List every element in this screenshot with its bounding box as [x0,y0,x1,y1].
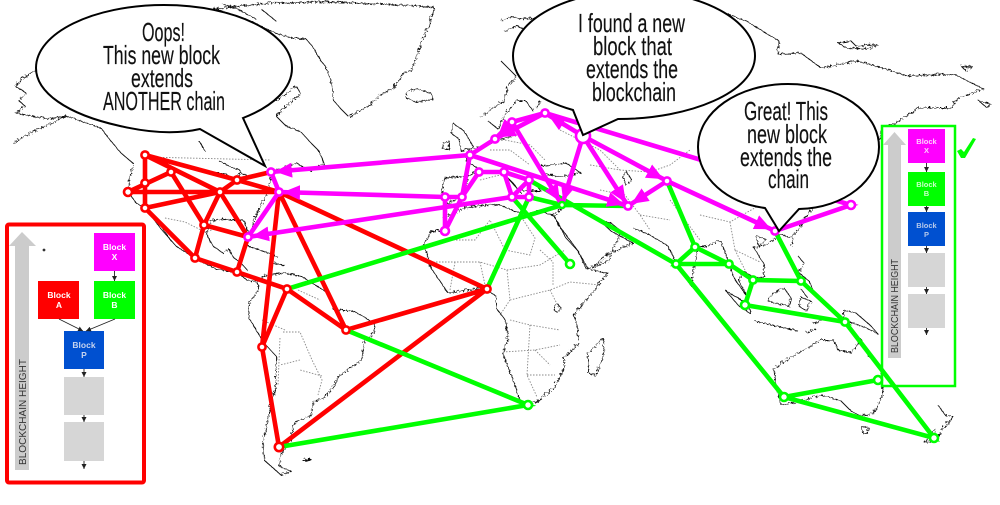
empty block 1 [64,377,104,415]
nodes: red [124,151,491,451]
network links: green [279,180,934,447]
block P: P [924,230,929,239]
network links: magenta with arrows [248,113,851,237]
callout: new block found [513,0,755,135]
block A [38,281,79,319]
callout: great [698,84,879,231]
panel: winning chain (green) [882,126,955,386]
block B: Block [916,180,938,189]
block B: Block [103,290,126,300]
country borders [145,130,760,397]
callout: Oops: This new block [103,40,221,70]
block B: B [111,300,118,310]
block P [908,212,945,246]
callout: great: Great! This [744,96,828,126]
callout: new block found: I found a new [578,8,685,38]
block B [94,281,135,319]
blockchain height arrow [883,132,906,358]
blockchain height arrow: BLOCKCHAIN HEIGHT [890,259,901,353]
stray dot [43,249,45,251]
callout: great: new block [747,119,828,149]
empty block 2 [64,422,104,461]
callout: new block found: block that [593,31,673,61]
block A: A [56,300,62,310]
callout: Oops: Oops! [142,17,185,47]
chain arrows [926,163,928,335]
block P: Block [916,221,938,230]
block X [94,233,135,271]
empty block 1 [908,253,945,287]
chain arrows [59,271,115,469]
nodes: green [524,202,938,442]
block P: Block [72,340,96,350]
block X: X [112,252,118,262]
callout: Oops: extends [131,63,193,93]
callout: Oops: ANOTHER chain [103,86,225,116]
block B [908,172,945,206]
callout: Oops [36,5,292,166]
icon: green check mark [957,138,976,158]
nodes: magenta [244,109,855,241]
network links: red [128,155,487,447]
panel frame [882,126,955,386]
block X: Block [103,242,126,252]
callout: great: extends the [740,142,832,172]
panel frame [7,224,144,482]
block A: Block [47,290,71,300]
block X: Block [916,137,938,146]
callout: new block found: extends the [586,54,678,84]
block B: B [924,189,930,198]
callout: new block found: blockchain [592,77,676,107]
panel: losing fork (red) [7,224,144,482]
block X [908,129,945,163]
empty block 2 [908,294,945,328]
blockchain height arrow [9,232,36,470]
block P [64,331,104,369]
block X: X [924,146,929,155]
block P: P [81,350,87,360]
blockchain height arrow: BLOCKCHAIN HEIGHT [17,358,29,465]
callout: great: chain [768,164,809,194]
